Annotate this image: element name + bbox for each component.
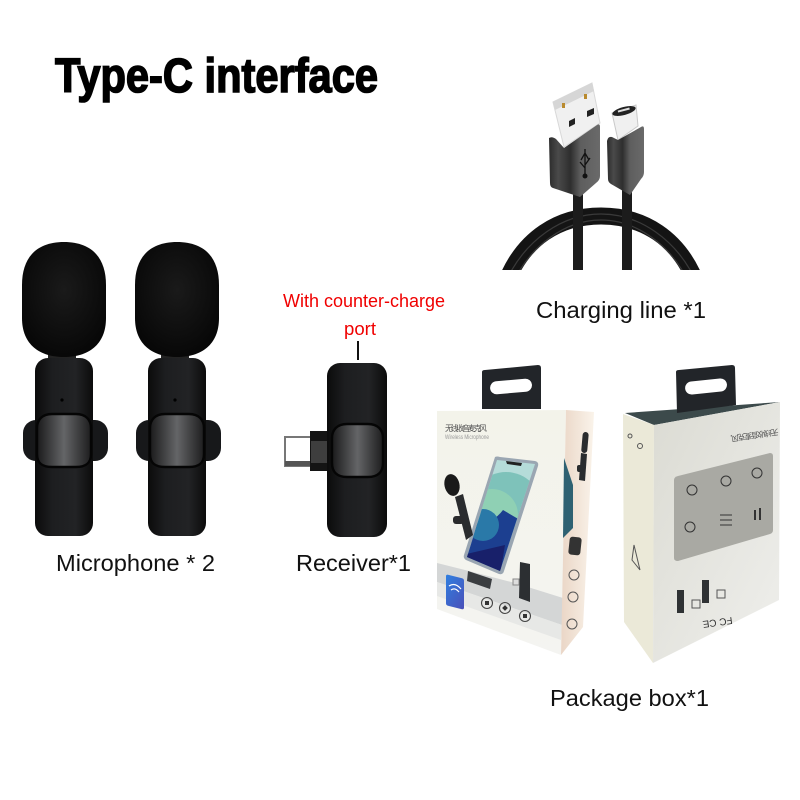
callout: counter-charge port: port (344, 319, 376, 339)
callout: counter-charge port (283, 291, 445, 360)
receiver in box art (513, 562, 530, 602)
title: Type-C interface (55, 50, 378, 103)
label: receiver: Receiver*1 (296, 550, 411, 576)
receiver (285, 363, 387, 537)
side face (561, 410, 594, 655)
box text: 无线收音麦克风 (730, 427, 779, 444)
label: charging line: Charging line *1 (536, 297, 706, 323)
small mic in box art (442, 473, 473, 540)
certification marks: FC CE (702, 614, 733, 629)
feature icons (482, 598, 530, 622)
cable loop (505, 214, 697, 285)
floor band (437, 563, 563, 625)
small receiver icons (677, 580, 725, 613)
microphone 1 (22, 242, 108, 536)
USB-A connector (549, 83, 600, 197)
back face (653, 402, 780, 663)
box text: 无线收音麦克风 (445, 423, 487, 433)
package box front view: Wireless Microphone (445, 435, 490, 441)
side face (623, 414, 654, 663)
label: microphone: Microphone * 2 (56, 550, 215, 576)
charging cable image (505, 83, 697, 285)
top face (625, 402, 780, 425)
microphone 2 (135, 242, 221, 536)
receiver stand in box art (467, 571, 492, 589)
side panel marks (628, 434, 642, 570)
USB-C connector (607, 104, 644, 195)
front face (437, 410, 566, 655)
hanger tab (482, 365, 541, 409)
grey feature panel (674, 453, 773, 561)
label: package box: Package box*1 (550, 685, 709, 711)
side art phone (563, 458, 573, 538)
side art mic (577, 432, 589, 481)
package box front view (437, 365, 594, 655)
phone (464, 456, 538, 574)
hanger tab (676, 365, 736, 413)
side art receiver (568, 536, 582, 556)
wifi badge (446, 574, 464, 610)
callout: counter-charge port: With counter-charge (283, 291, 445, 311)
feature icon glyphs (485, 601, 527, 618)
side art icons (567, 570, 579, 629)
package box back view (623, 365, 780, 663)
